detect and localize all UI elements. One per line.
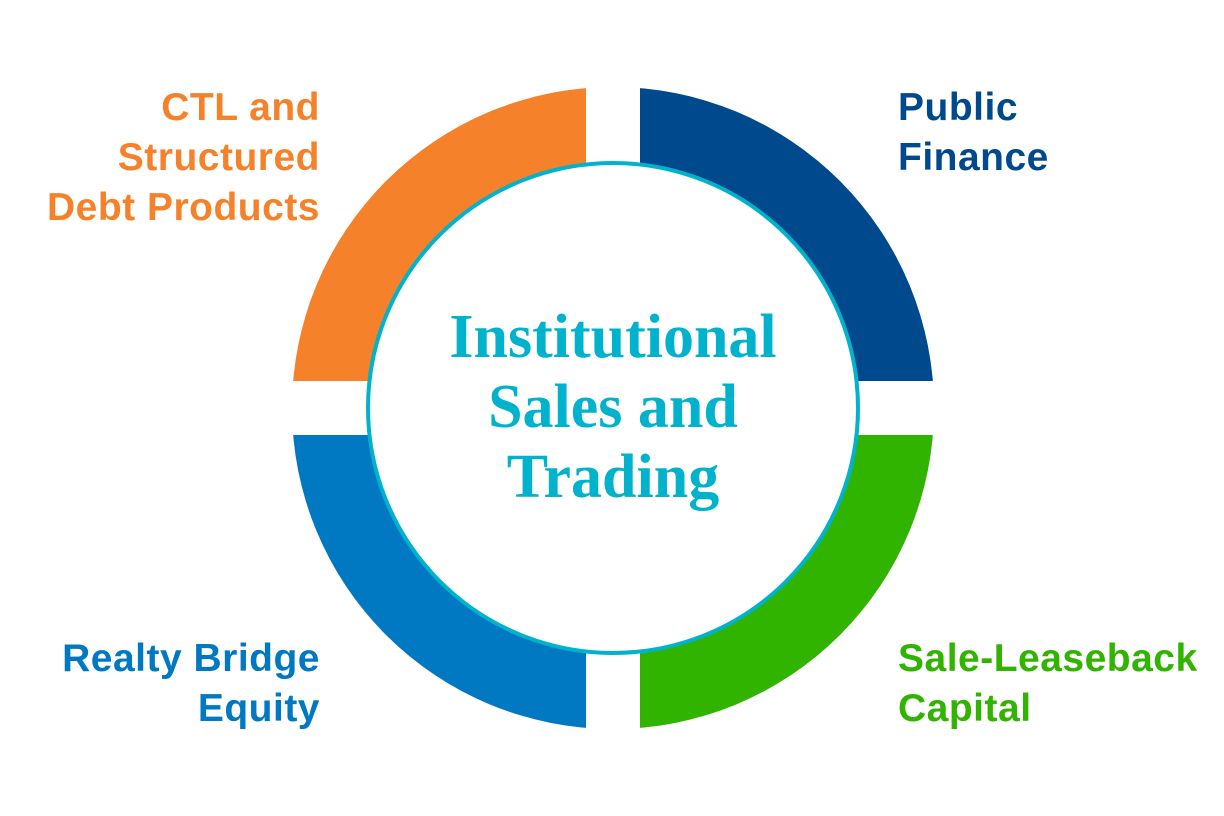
- label: CTL and Structured Debt Products: Structured: [118, 136, 320, 179]
- center title: Trading: [507, 443, 719, 511]
- label: Public Finance: Finance: [898, 136, 1049, 179]
- center title: Sales and: [488, 373, 738, 441]
- label: Realty Bridge Equity: Equity: [198, 687, 320, 730]
- label: Realty Bridge Equity: [62, 637, 320, 730]
- center title: [449, 303, 777, 511]
- quadrant: CTL (orange, top-left): [292, 87, 613, 408]
- quadrant: Sale-Leaseback (green, bottom-right): [613, 408, 934, 729]
- label: Public Finance: Public: [898, 86, 1018, 129]
- label: CTL and Structured Debt Products: CTL and: [161, 86, 320, 129]
- quadrant: Realty Bridge (blue, bottom-left): [292, 408, 613, 729]
- label: CTL and Structured Debt Products: [47, 86, 320, 229]
- label: Public Finance: [898, 86, 1049, 179]
- center title: Institutional: [449, 303, 777, 371]
- label: Sale-Leaseback Capital: [898, 637, 1198, 730]
- label: Sale-Leaseback Capital: Capital: [898, 687, 1032, 730]
- label: CTL and Structured Debt Products: Debt Products: [47, 186, 320, 229]
- center circle: [368, 163, 858, 653]
- label: Sale-Leaseback Capital: Sale-Leaseback: [898, 637, 1198, 680]
- label: Realty Bridge Equity: Realty Bridge: [62, 637, 320, 680]
- quadrant: Public Finance (navy, top-right): [613, 87, 934, 408]
